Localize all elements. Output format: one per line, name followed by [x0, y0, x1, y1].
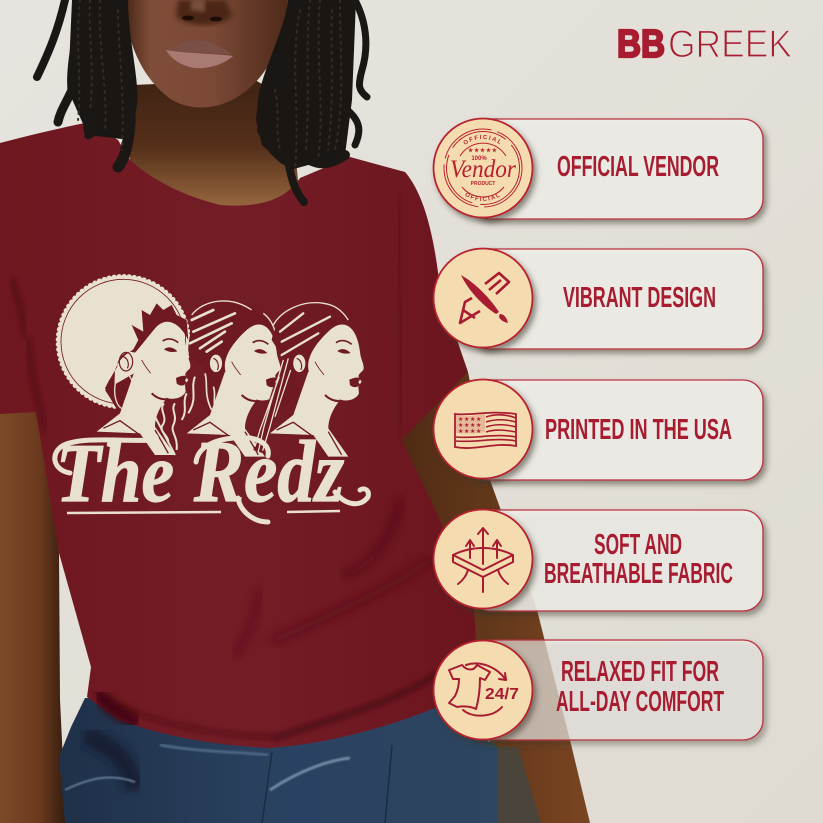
feature: soft and breathable fabric: [434, 510, 763, 611]
woman one hairline: [105, 303, 188, 397]
hoop earring: [115, 372, 133, 409]
title underline: [67, 511, 340, 513]
portrait group of three women: [58, 277, 364, 457]
label: SOFT AND: [594, 529, 682, 561]
icon: vendor stamp: OFFICIAL: [466, 192, 500, 201]
shirt folds: [12, 200, 435, 738]
title swashes: [55, 435, 368, 522]
woman three hair and head: [253, 303, 364, 457]
label: RELAXED FIT FOR: [561, 656, 719, 688]
icon: vendor stamp: [432, 118, 540, 226]
pill: [470, 640, 763, 740]
feature: official vendor: [432, 117, 771, 228]
afro hair: [58, 277, 188, 414]
icon: shirt 24/7: [434, 640, 532, 740]
wavy locks: [155, 377, 195, 455]
logo: [617, 23, 792, 66]
woman two hair and head: [187, 298, 280, 457]
left arm: [0, 410, 66, 823]
icon: pencil and brush: [434, 248, 532, 348]
logo: BB: [617, 23, 665, 66]
icon: shirt 24/7: 24/7: [485, 686, 519, 703]
icon: american flag: ★★★★: [458, 416, 482, 423]
feature: relaxed fit: [434, 640, 763, 740]
jeans folds: [65, 735, 392, 823]
label: OFFICIAL VENDOR: [557, 151, 719, 183]
icon: vendor stamp: PRODUCT: [471, 181, 495, 187]
pill: [470, 249, 763, 349]
label: [556, 656, 724, 718]
right arm: [380, 372, 590, 823]
face: [126, 0, 288, 108]
wall shadow behind jeans: [490, 720, 550, 823]
icon: american flag: ★★★★: [458, 422, 482, 429]
woman one head: [97, 323, 190, 455]
hair dreadlocks: [37, 0, 367, 202]
pill: [470, 119, 763, 219]
pill: [470, 380, 763, 480]
icon: vendor stamp: OFFICIAL: [464, 134, 500, 144]
jeans: [59, 698, 497, 823]
icon: breathable fabric: [434, 510, 532, 608]
t-shirt: [0, 122, 476, 748]
feature: vibrant design: [434, 248, 763, 349]
nose and lips: [166, 0, 233, 68]
shirt graphic: the redz: Redz: [193, 424, 344, 521]
label: VIBRANT DESIGN: [563, 282, 716, 314]
icon: american flag: ★★★★: [458, 428, 482, 435]
icon: vendor stamp: 100%: [471, 156, 487, 162]
pill: [470, 510, 763, 611]
icon: vendor stamp: Vendor: [450, 156, 516, 183]
title script: The: [56, 427, 174, 520]
icon: vendor stamp: ★★★★★: [468, 147, 498, 154]
icon: american flag: [434, 380, 532, 478]
neck: [128, 80, 300, 215]
feature: printed in the usa: [434, 380, 763, 480]
logo: GREEK: [668, 23, 792, 66]
model photo: [0, 0, 590, 823]
shirt graphic: the redz: [55, 277, 368, 522]
label: [544, 529, 733, 590]
